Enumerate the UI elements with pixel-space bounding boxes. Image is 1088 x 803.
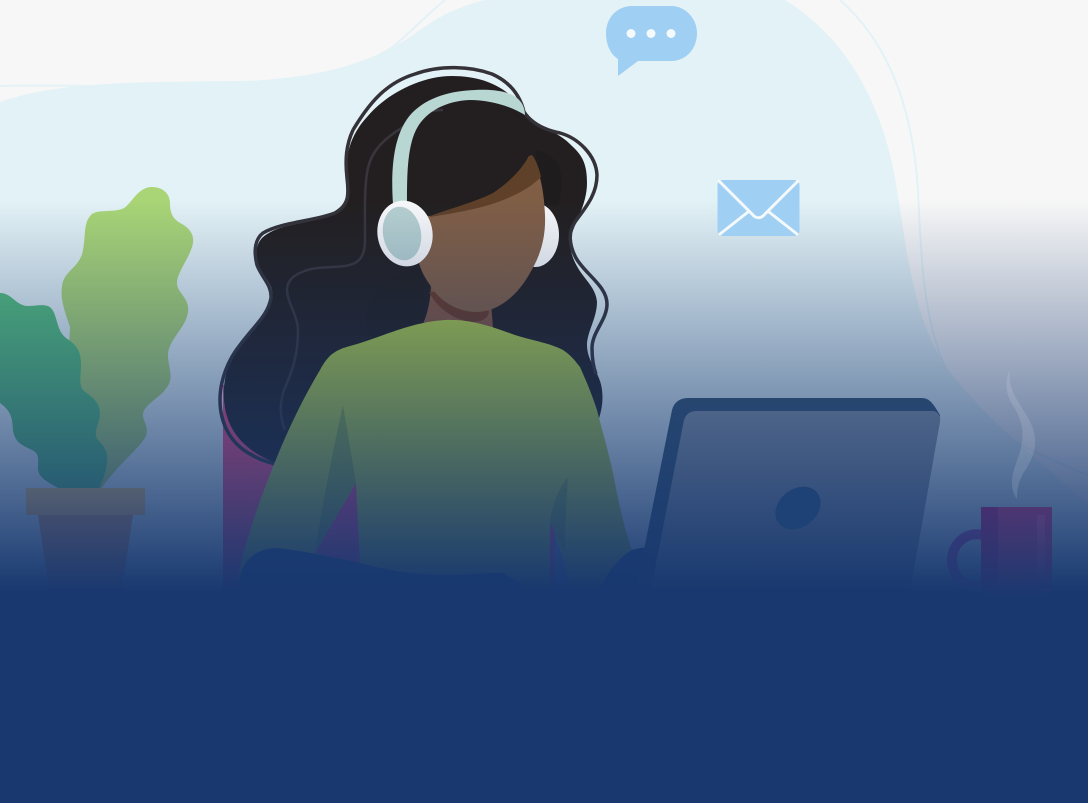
mug body xyxy=(981,507,1052,595)
far ear cup xyxy=(511,203,559,267)
neck xyxy=(423,280,493,328)
pot xyxy=(26,488,145,595)
forearms on desk xyxy=(238,547,650,590)
icon: envelope xyxy=(718,180,800,236)
laptop lid xyxy=(645,411,940,620)
sweater fold left xyxy=(315,405,356,553)
laptop back edge xyxy=(630,398,940,620)
sweater fold right xyxy=(550,477,568,553)
front hair xyxy=(407,109,533,216)
laptop logo xyxy=(767,478,829,538)
bottom panel xyxy=(0,591,1088,803)
hair shadow around neck xyxy=(366,268,430,348)
ear pad xyxy=(379,204,425,263)
pot rim xyxy=(26,488,145,515)
back leaf xyxy=(62,187,193,490)
plant leaves xyxy=(0,187,193,490)
hair highlight strand xyxy=(281,110,443,430)
neck shadow xyxy=(429,290,489,322)
sweater gap left xyxy=(315,483,360,565)
face xyxy=(417,157,545,312)
headset xyxy=(372,90,525,271)
hair shadow behind face xyxy=(536,150,562,205)
pot body xyxy=(38,515,133,595)
hair shadow on forehead xyxy=(430,155,541,217)
mug xyxy=(952,507,1052,595)
icon: chat bubble xyxy=(606,6,697,76)
background contour lines xyxy=(0,0,1088,475)
mug shine xyxy=(1037,515,1045,587)
laptop xyxy=(630,398,940,620)
fade overlay xyxy=(0,200,1088,592)
front leaf xyxy=(0,293,107,488)
ear cup xyxy=(372,196,438,271)
hair outline xyxy=(220,68,607,464)
mug shade xyxy=(981,507,998,595)
mug handle xyxy=(952,534,983,587)
hair xyxy=(224,76,602,462)
steam xyxy=(1006,370,1035,499)
chair xyxy=(223,385,555,620)
background through right gap xyxy=(555,533,572,590)
sweater gap right xyxy=(550,522,555,590)
sweater xyxy=(236,320,640,625)
headband xyxy=(392,90,525,204)
